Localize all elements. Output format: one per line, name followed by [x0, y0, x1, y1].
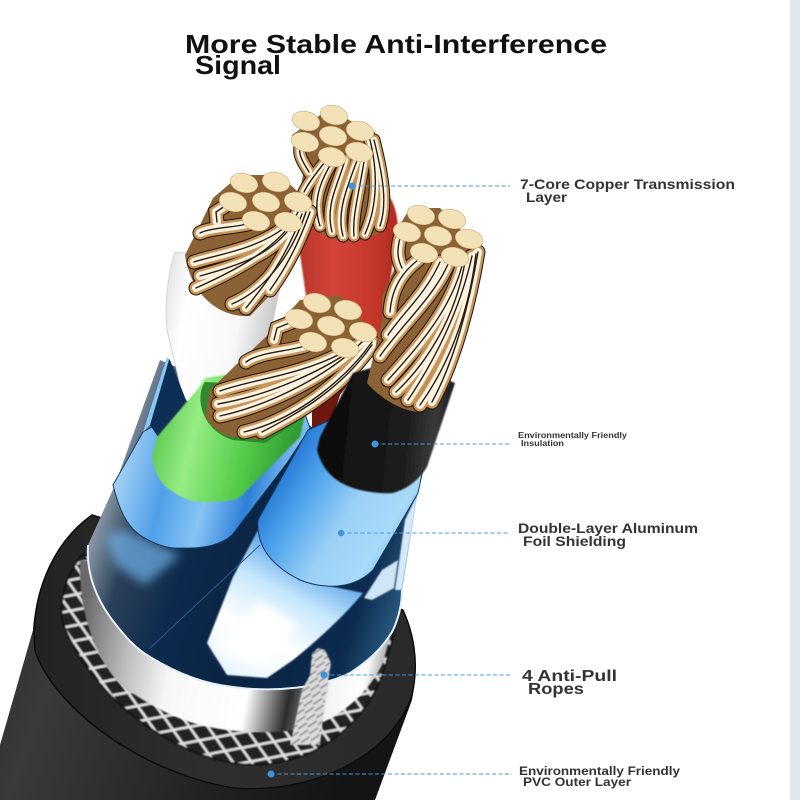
- right edge strip: [790, 0, 800, 800]
- red insulation: [298, 190, 398, 360]
- foil edge right: [395, 493, 418, 590]
- outer PVC jacket: [0, 515, 414, 800]
- core shadow: [185, 175, 312, 316]
- dark red lower section: [312, 340, 380, 440]
- core shadow: [292, 108, 388, 240]
- strand ends: [283, 290, 379, 361]
- white wire: [166, 169, 314, 420]
- anti-pull rope: [290, 648, 331, 745]
- callout: copper layer: Layer: [526, 189, 568, 205]
- strand ends: [289, 102, 376, 170]
- callout: PVC jacket: Environmentally Friendly: [519, 764, 680, 778]
- white insulation: [166, 252, 280, 420]
- black wire: [317, 202, 485, 493]
- silver tape band: [80, 560, 402, 732]
- strand ends: [217, 169, 314, 235]
- callout: PVC jacket: [268, 764, 680, 789]
- black insulation: [317, 360, 455, 493]
- callout: aluminum foil: [338, 520, 698, 549]
- title: Signal: [195, 50, 281, 80]
- core shadow: [367, 208, 480, 412]
- core shadow: [205, 295, 377, 440]
- red wire: [289, 102, 398, 440]
- callout: copper layer: [348, 176, 735, 205]
- callout: insulation: [372, 431, 628, 448]
- strand ends: [391, 202, 485, 270]
- dark gap beside white wire: [150, 358, 186, 440]
- green wire: [152, 290, 379, 502]
- callout: insulation: Insulation: [521, 439, 564, 448]
- seam line: [150, 545, 260, 648]
- title: More Stable Anti-Interference: [185, 29, 607, 59]
- jacket rim: [34, 515, 415, 789]
- green insulation: [152, 373, 305, 502]
- cable illustration: [0, 102, 485, 800]
- clear foil outline: [88, 545, 402, 689]
- copper strands: [380, 238, 478, 405]
- braided shield: [62, 555, 400, 765]
- callout: PVC jacket: PVC Outer Layer: [523, 775, 631, 789]
- green opening shadow: [200, 382, 303, 443]
- copper strands: [300, 136, 384, 236]
- callout: aluminum foil: Double-Layer Aluminum: [518, 520, 698, 536]
- pale reflection right: [364, 560, 398, 600]
- central light streak: [207, 530, 363, 678]
- foil tube around black wire: [258, 420, 425, 586]
- inner foil base: [88, 360, 418, 689]
- title: [185, 29, 607, 80]
- callout: ropes: [320, 668, 617, 698]
- copper strands: [194, 204, 310, 308]
- glass highlight left: [105, 530, 180, 585]
- callout: aluminum foil: Foil Shielding: [523, 533, 626, 549]
- glow on streak: [215, 600, 300, 668]
- callout: insulation: Environmentally Friendly: [518, 431, 628, 440]
- foil edge beside white wire: [143, 357, 169, 432]
- callout: ropes: Ropes: [528, 681, 584, 698]
- callout: ropes: 4 Anti-Pull: [522, 668, 617, 685]
- copper strands: [218, 322, 372, 432]
- foil tube around green wire: [113, 400, 310, 548]
- callout: copper layer: 7-Core Copper Transmission: [520, 176, 735, 192]
